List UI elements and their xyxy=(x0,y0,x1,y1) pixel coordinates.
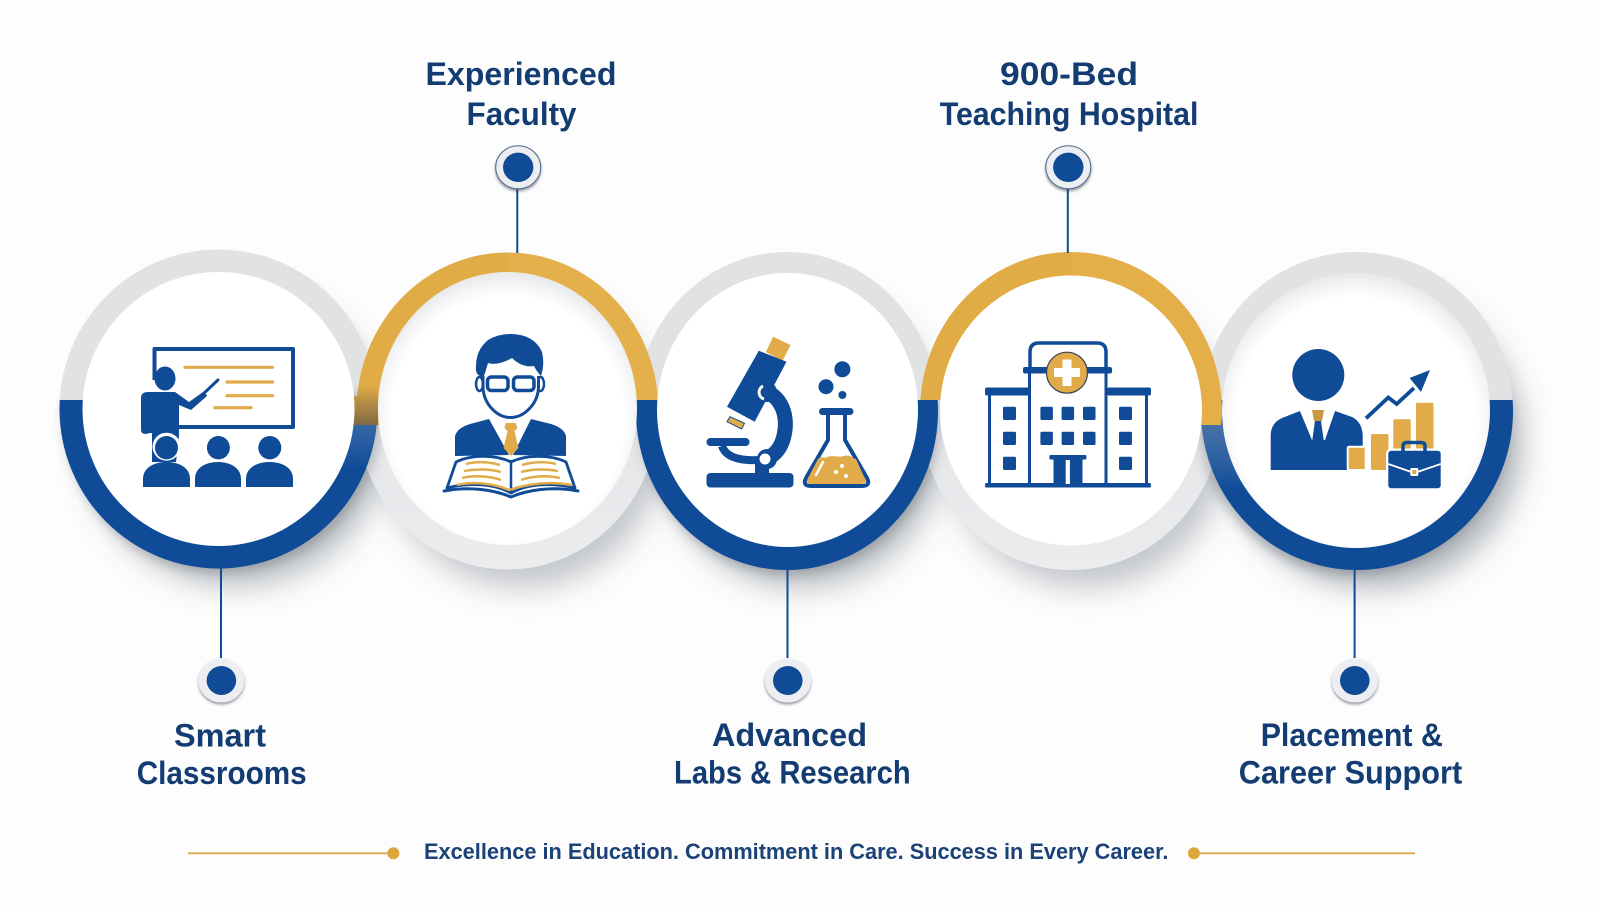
callout: Placement and Career Support: Career Support xyxy=(1239,754,1463,790)
icon: microscope xyxy=(706,337,794,488)
callout: Experienced Faculty: Experienced xyxy=(426,56,616,92)
icon: teacher with open book xyxy=(444,334,578,497)
panel: Smart Classrooms disc xyxy=(82,272,354,546)
ring 4 gold band xyxy=(920,252,1222,425)
footer tagline xyxy=(188,839,1415,864)
ring 3 band xyxy=(636,252,938,570)
drop shadows under rings xyxy=(86,290,1522,588)
panel: Teaching Hospital disc xyxy=(940,276,1202,546)
callout: Advanced Labs and Research: Advanced xyxy=(712,717,867,753)
callout: 900-Bed Teaching Hospital: 900-Bed xyxy=(1000,56,1138,92)
callout: Placement and Career Support: Placement & xyxy=(1261,717,1443,753)
panel: Placement and Career Support disc xyxy=(1222,273,1490,548)
callout: Smart Classrooms: Classrooms xyxy=(137,755,307,791)
panel: Experienced Faculty disc xyxy=(378,272,637,545)
callout: Advanced Labs and Research xyxy=(674,570,911,790)
ring 5 band xyxy=(1201,252,1513,570)
panel: Advanced Labs disc xyxy=(657,273,918,547)
callout: Smart Classrooms: Smart xyxy=(174,718,266,754)
callout: 900-Bed Teaching Hospital xyxy=(940,56,1198,253)
interlocking rings xyxy=(60,250,1513,575)
icon: flask xyxy=(805,361,868,486)
callout: 900-Bed Teaching Hospital: Teaching Hospital xyxy=(940,96,1198,132)
icon: hospital xyxy=(985,343,1151,488)
ring 2 gold band xyxy=(354,252,658,570)
callout: Advanced Labs and Research: Labs & Research xyxy=(674,754,911,790)
ring 1 band xyxy=(60,250,378,568)
callout: Placement and Career Support xyxy=(1239,570,1463,790)
callout: Experienced Faculty xyxy=(426,56,616,253)
callout: Experienced Faculty: Faculty xyxy=(466,96,577,132)
icon: professional with growth chart and briefcase xyxy=(1271,349,1443,490)
footer tagline: Excellence in Education. Commitment in Care. Success in Every Career. xyxy=(424,839,1168,864)
callout: Smart Classrooms xyxy=(137,568,307,791)
icon: classroom xyxy=(141,349,293,487)
